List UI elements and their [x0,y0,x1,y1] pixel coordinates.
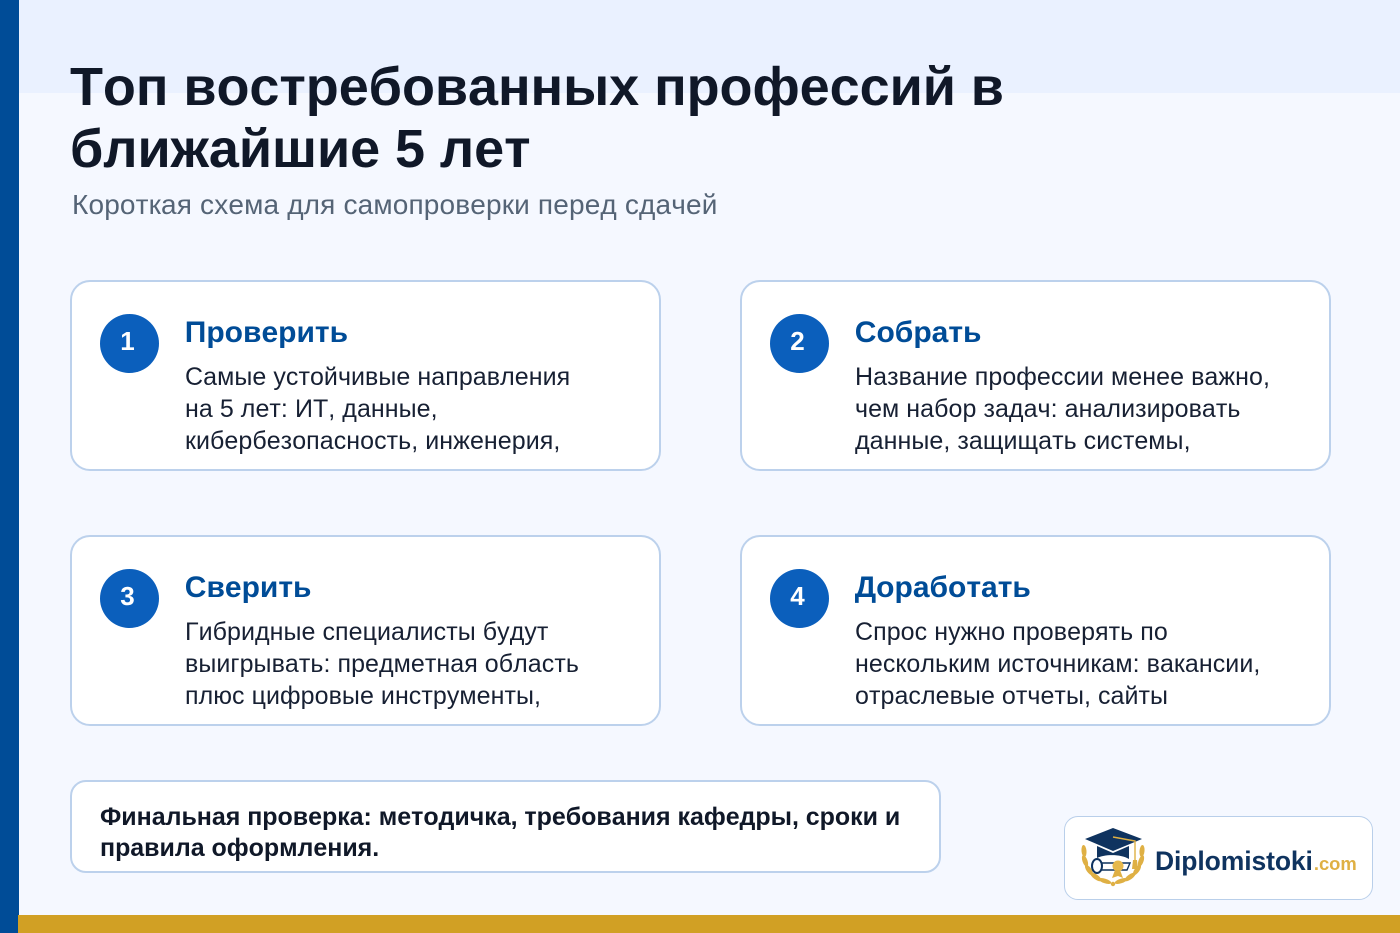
subtitle: Короткая схема для самопроверки перед сдачей [72,189,718,220]
panel: step 2 [740,280,1331,471]
bottom gold bar [18,915,1400,933]
step 3 text: Гибридные специалисты будут [185,618,548,646]
step number 2: 2 [790,326,805,356]
step 3 heading: Сверить [185,571,312,604]
step number 4: 4 [790,581,805,611]
panel: final check callout [70,780,941,873]
step 1 text: Самые устойчивые направления [185,363,570,391]
step 1 text [185,363,570,455]
step 2 text: Название профессии менее важно, [855,363,1270,391]
step 1 text: на 5 лет: ИТ, данные, [185,395,438,423]
step 2 text: чем набор задач: анализировать [855,395,1240,423]
step 4 text [855,618,1260,710]
step number 3: 3 [120,581,135,611]
left accent bar [0,0,19,933]
step number 3 [100,569,159,628]
step number 1: 1 [120,326,135,356]
panel: step 1 [70,280,661,471]
step 2 text [855,363,1270,455]
step 2 text: данные, защищать системы, [855,427,1191,455]
step 4 text: Спрос нужно проверять по [855,618,1168,646]
panel: final check callout: Финальная проверка: методичка, требования кафедры, сроки и [100,803,900,831]
step 1 text: кибербезопасность, инженерия, [185,427,560,455]
top header band [18,0,1400,93]
icon: graduation cap with laurel [1081,828,1145,886]
step 1 heading: Проверить [185,316,348,349]
title: ближайшие 5 лет [70,119,531,179]
logo card [1064,816,1373,900]
step 4 text: нескольким источникам: вакансии, [855,650,1260,678]
step 4 heading: Доработать [855,571,1031,604]
title: Топ востребованных профессий в [70,57,1004,117]
step 2 heading: Собрать [855,316,981,349]
step number 1 [100,314,159,373]
step 3 text: выигрывать: предметная область [185,650,579,678]
step 3 text: плюс цифровые инструменты, [185,682,541,710]
panel: final check callout: правила оформления. [100,834,379,862]
logo wordmark: Diplomistoki.com [1155,846,1357,876]
step number 4 [770,569,829,628]
step number 2 [770,314,829,373]
step 4 text: отраслевые отчеты, сайты [855,682,1168,710]
panel: step 4 [740,535,1331,726]
step 3 text [185,618,579,710]
title [70,57,1004,179]
panel: step 3 [70,535,661,726]
